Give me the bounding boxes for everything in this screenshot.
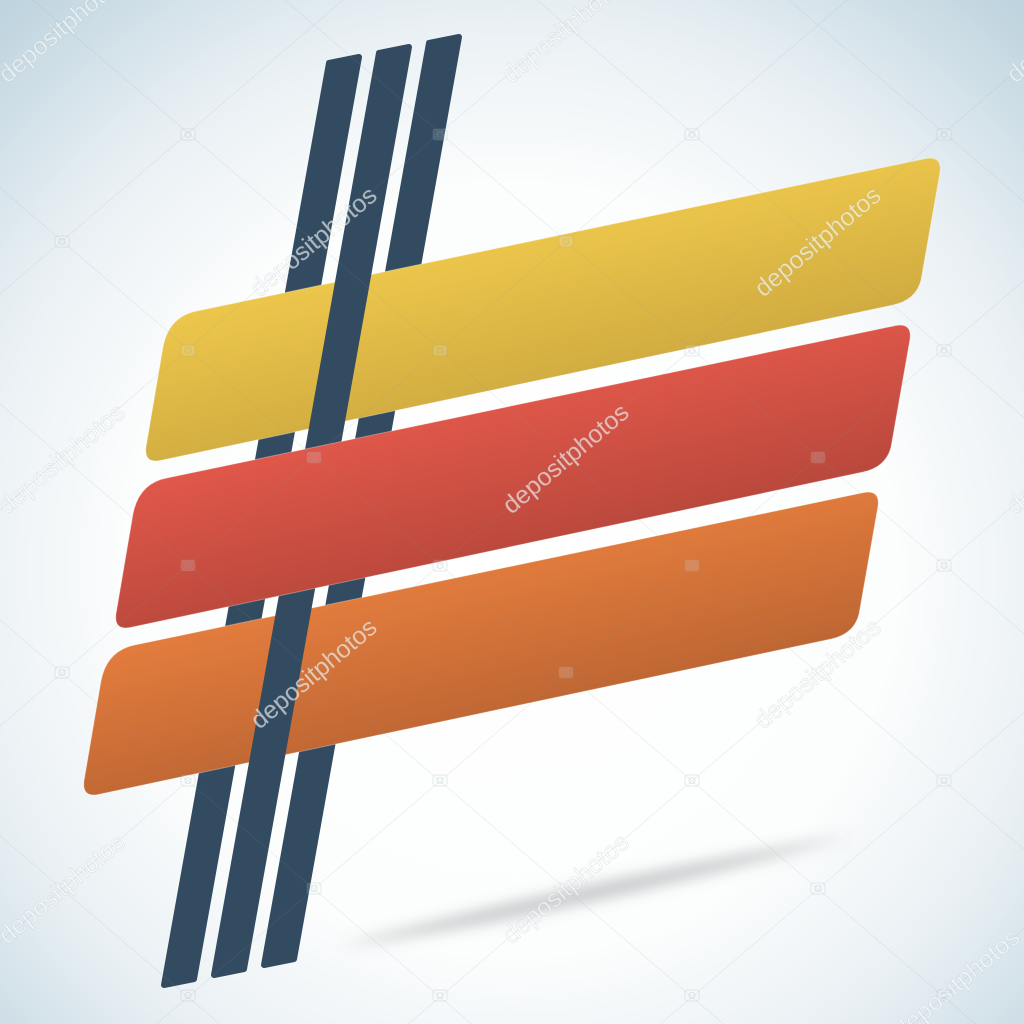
yellow ribbon xyxy=(146,158,940,461)
ground shadow xyxy=(340,836,850,946)
watermark text: depositphotos xyxy=(749,613,886,735)
watermark camera icons xyxy=(55,129,951,1001)
watermark text: depositphotos xyxy=(749,181,886,303)
watermark text: depositphotos xyxy=(245,613,382,735)
middle vertical bar xyxy=(214,47,409,975)
left and right vertical bars xyxy=(164,37,459,985)
red ribbon xyxy=(116,325,910,628)
orange ribbon xyxy=(84,492,878,795)
watermark text: depositphotos xyxy=(245,181,382,303)
watermark text: depositphotos xyxy=(497,828,634,950)
watermark text: depositphotos xyxy=(497,398,634,520)
